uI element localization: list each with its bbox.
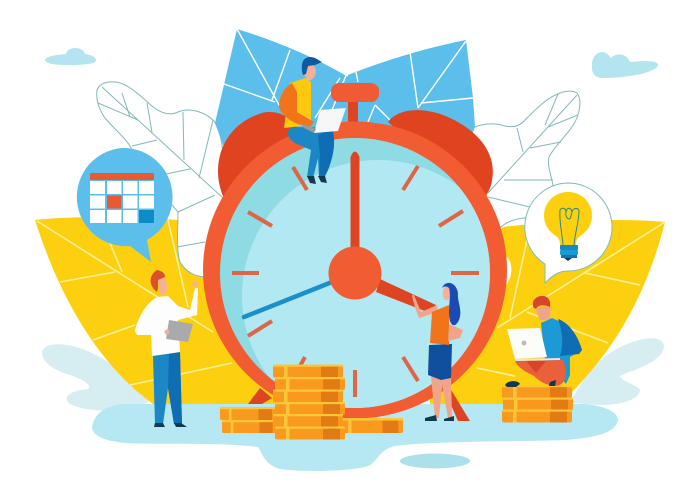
laptop — [507, 328, 547, 359]
clock face — [242, 160, 490, 408]
laptop — [314, 108, 346, 133]
blue leaf left — [215, 29, 350, 165]
hand: minute — [350, 152, 360, 250]
blue leaf right — [345, 40, 475, 140]
clock face ring — [220, 138, 490, 408]
coins: left pile — [220, 407, 277, 433]
hub — [328, 246, 382, 300]
coins: right flat coin — [338, 418, 403, 433]
outline leaf right — [470, 91, 580, 284]
illustration: alarm clock with people and coins — [35, 29, 666, 471]
cloud right — [592, 52, 658, 78]
coins: central stack — [273, 364, 345, 440]
ground small ellipse — [400, 454, 470, 468]
clock rim — [203, 122, 507, 418]
hour ticks — [232, 166, 479, 397]
calendar — [90, 173, 154, 223]
hand: second — [244, 282, 332, 317]
speech bubble: idea — [525, 183, 612, 283]
person: top man on clock — [279, 57, 346, 184]
left bell — [218, 112, 300, 196]
ground puddle — [92, 404, 618, 471]
clock stem — [348, 100, 358, 126]
speech bubble: calendar — [77, 148, 173, 262]
background blob right — [570, 338, 664, 405]
outline leaf left — [97, 82, 225, 277]
person: left man with tablet — [135, 270, 198, 427]
clock cap — [331, 83, 379, 102]
background blob left — [42, 344, 150, 411]
clock — [203, 83, 514, 432]
light bulb — [544, 192, 592, 261]
person: sitting man with laptop — [505, 296, 582, 387]
right foot — [448, 388, 470, 421]
right bell — [388, 110, 493, 196]
left foot — [248, 388, 272, 404]
yellow leaf left — [35, 217, 290, 404]
coins: stack under sitting man — [502, 385, 573, 422]
person: woman at clock hand — [412, 283, 463, 421]
hand: hour — [376, 279, 436, 313]
yellow leaf right — [430, 220, 665, 404]
tablet — [166, 320, 193, 342]
cloud left — [45, 48, 96, 65]
